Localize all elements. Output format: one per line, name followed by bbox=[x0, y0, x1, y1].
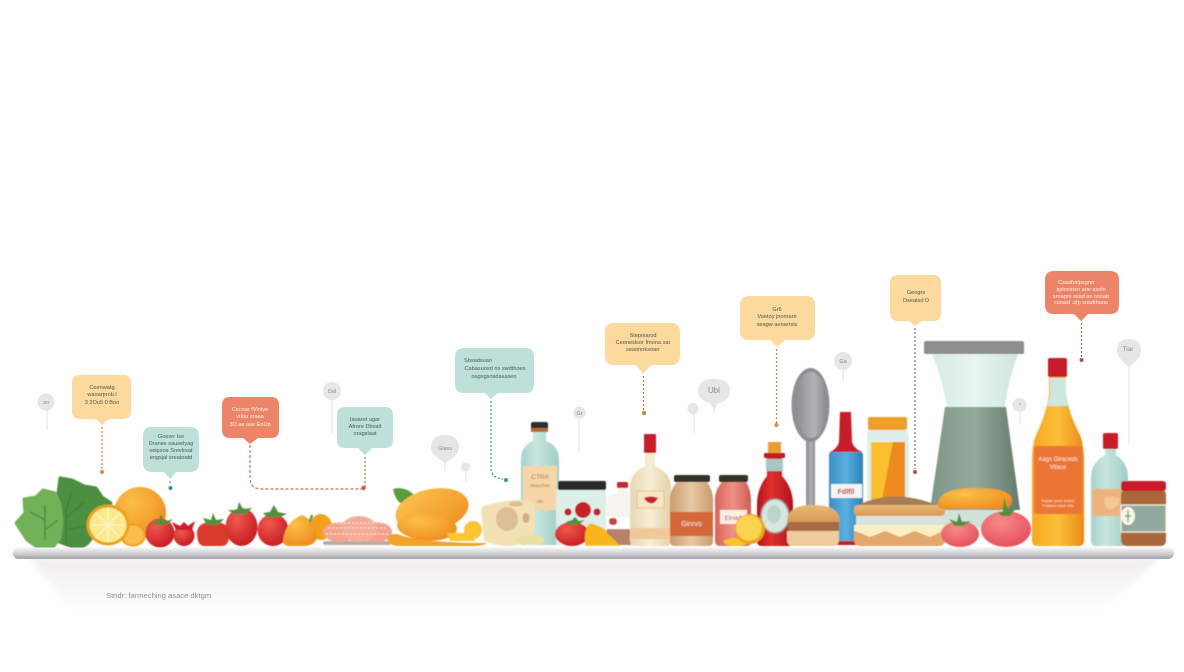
callout: yellow 6: seaonnksoarr bbox=[626, 347, 660, 353]
pin 10 bbox=[1117, 339, 1141, 444]
bottle: orange juice bbox=[1032, 358, 1084, 546]
pin 7 bbox=[698, 379, 730, 413]
jar: honey bbox=[867, 417, 909, 505]
bottle: orange juice: Fdataus liach Ela bbox=[1043, 503, 1074, 508]
food: tomato and lemon bbox=[555, 517, 619, 546]
food: small tomato bbox=[941, 513, 979, 547]
callout: teal 5: Sbsadsuan bbox=[464, 358, 492, 364]
callout: teal 2: seipsoa Srevtrsat bbox=[149, 448, 193, 454]
pin 3: Glass bbox=[438, 446, 452, 452]
callout: yellow 1 bbox=[72, 375, 131, 474]
food: orange slice bbox=[120, 524, 146, 546]
callout: yellow 7: Gr6 bbox=[772, 307, 782, 313]
food: raspberry bbox=[172, 521, 195, 546]
callout: yellow 6: Stepoiarod bbox=[629, 333, 657, 339]
food: lemon wedge over small bottle bbox=[586, 525, 619, 545]
callout: coral 3 with connector: 3O.ae ase EoUp bbox=[229, 422, 271, 428]
callout: yellow 8 bbox=[890, 275, 941, 474]
food: tomato bbox=[197, 513, 229, 546]
callout: yellow 1: waoarprob.l bbox=[86, 392, 117, 398]
big jar: lid and glass bbox=[924, 341, 1024, 528]
callout: yellow 7 bbox=[740, 296, 815, 427]
callout: coral 9: sploostsn aoe ssoln bbox=[1056, 287, 1106, 293]
pin 9 bbox=[1012, 398, 1026, 424]
food: tomato bbox=[146, 514, 174, 548]
bottle: teal with peach label: CTRA bbox=[531, 474, 550, 481]
callout: yellow 6 bbox=[605, 323, 680, 415]
food: lemons bbox=[283, 514, 332, 546]
callout: coral 9: csoasl .sfp sosdthans bbox=[1054, 300, 1108, 306]
food: tomato bbox=[226, 502, 258, 546]
jar: pink bbox=[715, 475, 751, 546]
food: large tomato bbox=[981, 497, 1031, 547]
bottle: orange juice: Sapas yaus andus bbox=[1042, 498, 1074, 503]
shelf shadow bbox=[30, 558, 1160, 610]
callout: coral 9: Csaafurlpsgnn bbox=[1058, 280, 1094, 286]
pin 2: Dal bbox=[328, 389, 336, 395]
callout: teal 5: Cabasuosd ns swdthoes bbox=[465, 366, 526, 372]
callout: teal 4: Iaoaret ugar bbox=[350, 417, 380, 423]
callout: teal 2 bbox=[143, 427, 199, 490]
callout: yellow 8: Dseatsd D bbox=[903, 298, 929, 304]
pin 1: so bbox=[43, 400, 49, 406]
callout: teal 5 bbox=[455, 348, 534, 482]
bottle: teal with peach label bbox=[521, 422, 559, 545]
pin 4 bbox=[461, 462, 470, 482]
callout: teal 4: oragslaat bbox=[353, 431, 377, 437]
bottle: ketchup bbox=[757, 442, 793, 546]
jar: pink: Elnad bbox=[725, 515, 742, 522]
callout: coral 3 with connector bbox=[222, 397, 363, 489]
callout: yellow 1: Coenwatg bbox=[89, 385, 115, 391]
pin 1 bbox=[38, 394, 54, 430]
pin 5 bbox=[574, 406, 586, 452]
caption: Stndr: farmeching asace dktgm bbox=[106, 591, 211, 600]
jar: brown bbox=[1121, 481, 1166, 546]
bottle: teal with peach label: Sbaeuhan bbox=[530, 483, 551, 488]
jar: red dots bbox=[556, 481, 606, 545]
pin 8 bbox=[834, 352, 852, 382]
callout: yellow 7: Voetoy jnonrarn bbox=[757, 314, 797, 320]
callout: teal 2: engsjal sreatoatd bbox=[150, 455, 192, 461]
food: lettuce bbox=[16, 478, 111, 550]
food: lemon slice bbox=[86, 504, 130, 546]
pin 7: Ubi bbox=[708, 386, 720, 395]
callout: yellow 1: 3 2Ou5 0 Boo bbox=[85, 400, 119, 406]
callout: yellow 7: seagw aenarrsis bbox=[757, 322, 798, 328]
callout: teal 2: Dranse sauselyag bbox=[149, 441, 193, 447]
bottle: teal with peach label: ND bbox=[537, 499, 544, 504]
callout: coral 9 bbox=[1045, 271, 1119, 362]
bottle: cream bbox=[630, 434, 671, 546]
spoon bbox=[792, 368, 830, 506]
bottle: teal with heart label bbox=[1091, 433, 1128, 546]
pin 5: Gr bbox=[576, 411, 583, 417]
pin 6 bbox=[688, 403, 698, 433]
callout: teal 4 bbox=[337, 407, 393, 490]
callout: yellow 8: Geogrs bbox=[907, 290, 925, 296]
pin 2 bbox=[323, 382, 341, 433]
pin 9: * bbox=[1019, 403, 1022, 409]
callout: coral 9: sroaprs ssad as osoab bbox=[1053, 294, 1109, 300]
food: lemon bbox=[723, 514, 765, 546]
bottle: orange juice: Vllace bbox=[1050, 465, 1067, 471]
bottle: small white bbox=[607, 482, 631, 545]
bottle: blue bbox=[829, 412, 863, 545]
food: mango with leaf bbox=[387, 482, 487, 546]
bun bbox=[938, 488, 1012, 509]
bottle: blue: Fdlfll bbox=[838, 489, 854, 496]
bottle: orange juice: Aags Giraceds bbox=[1038, 457, 1078, 463]
food: tomato bbox=[258, 505, 288, 546]
food: orange bbox=[114, 487, 166, 539]
callout: coral 3 with connector: Cecoar fVintye bbox=[232, 407, 268, 413]
pin 10: Tiar bbox=[1123, 346, 1134, 353]
pin 3 bbox=[431, 435, 459, 471]
callout: teal 2: Goesrr Ise bbox=[158, 434, 184, 440]
callout: coral 3 with connector: vIIou sraaa bbox=[236, 414, 265, 420]
food: pink meat on plate bbox=[323, 516, 392, 545]
food: cheese bbox=[481, 500, 544, 546]
jar: beige: Ginrvo bbox=[681, 521, 702, 528]
sandwich bbox=[854, 496, 945, 546]
callout: teal 4: Afrore Dbvalt bbox=[349, 424, 382, 430]
pin 8: Ga bbox=[839, 359, 848, 365]
callout: yellow 6: Ceoneslsor fmona sar bbox=[616, 340, 670, 346]
burger bbox=[787, 505, 840, 546]
shelf bbox=[13, 548, 1174, 559]
jar: beige bbox=[670, 475, 713, 546]
callout: teal 5: oagsgsosdasasen bbox=[471, 374, 517, 380]
